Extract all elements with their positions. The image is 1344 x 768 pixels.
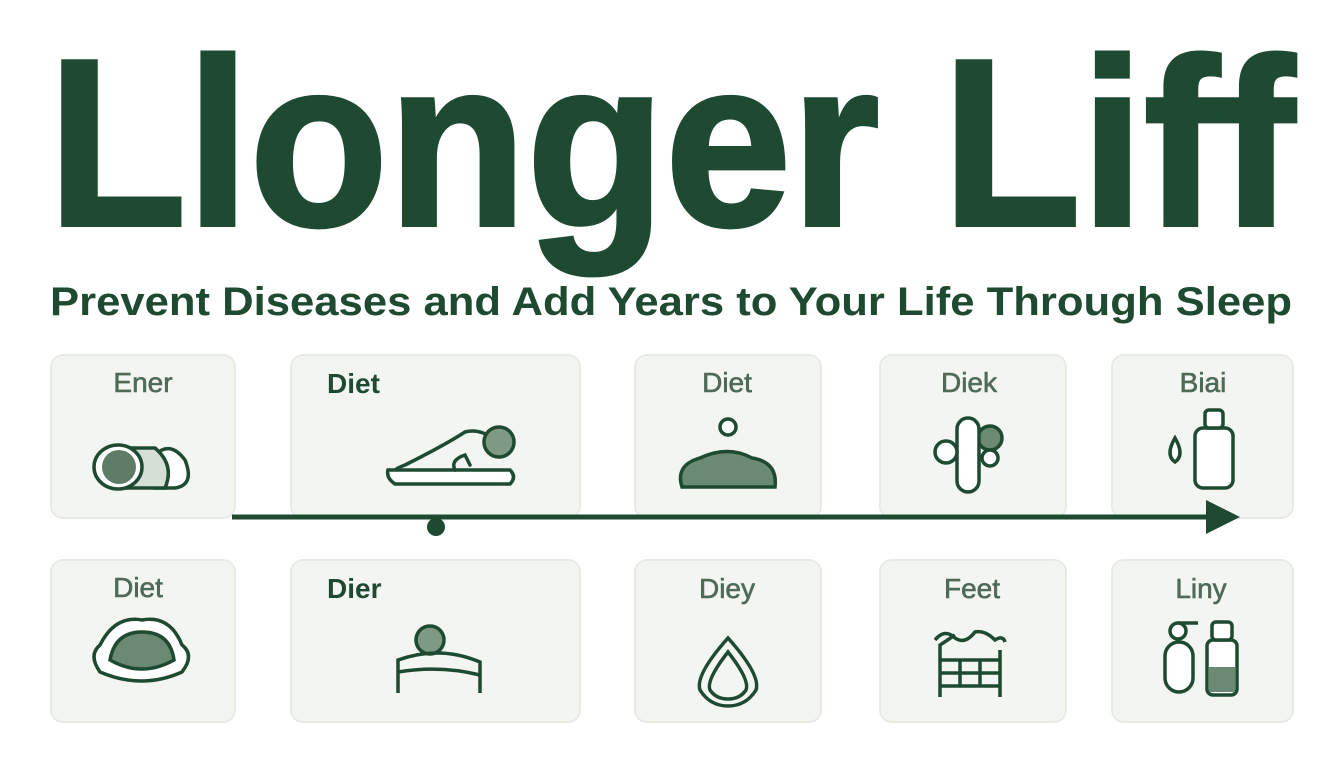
panel: row 1 card 4: Diek xyxy=(941,367,998,398)
icon: links xyxy=(935,418,1002,492)
icon: bottle and drop xyxy=(1170,410,1233,488)
title: Llonger Liff xyxy=(48,11,1296,276)
panel: row 1 card 3 xyxy=(635,355,821,518)
panel: row 2 card 1: Diet xyxy=(113,572,163,603)
icon: head on bed xyxy=(398,626,480,693)
panel: row 1 card 1 xyxy=(51,355,235,518)
panel: row 2 card 2: Dier xyxy=(327,573,382,604)
panel: row 2 card 5 xyxy=(1112,560,1293,722)
icon: round pillow xyxy=(94,619,188,681)
panel: row 1 card 4 xyxy=(880,355,1066,518)
panel: row 2 card 4: Feet xyxy=(944,573,1000,604)
panel: row 1 card 1: Ener xyxy=(113,367,173,398)
icon: pillow roll xyxy=(94,445,188,489)
panel: row 2 card 4 xyxy=(880,560,1066,722)
panel: row 2 card 3: Diey xyxy=(699,573,755,604)
panel: row 1 card 5 xyxy=(1112,355,1293,518)
icon: person sleeping xyxy=(388,427,514,484)
panel: row 2 card 1 xyxy=(51,560,235,722)
panel: row 1 card 3: Diet xyxy=(702,367,752,398)
panel: row 2 card 2 xyxy=(291,560,580,722)
arrow: timeline xyxy=(232,500,1240,536)
icon: fence grid xyxy=(935,632,1005,697)
panel: row 1 card 2: Diet xyxy=(327,368,380,399)
panel: row 2 card 3 xyxy=(635,560,821,722)
subtitle: Prevent Diseases and Add Years to Your Life Through Sleep xyxy=(50,280,1292,324)
icon: bottles xyxy=(1165,622,1237,695)
icon: water drop xyxy=(699,638,757,706)
panel: row 1 card 5: Biai xyxy=(1180,367,1226,398)
icon: cloud mound xyxy=(680,419,775,487)
panel: row 1 card 2 xyxy=(291,355,580,518)
panel: row 2 card 5: Liny xyxy=(1175,573,1227,604)
